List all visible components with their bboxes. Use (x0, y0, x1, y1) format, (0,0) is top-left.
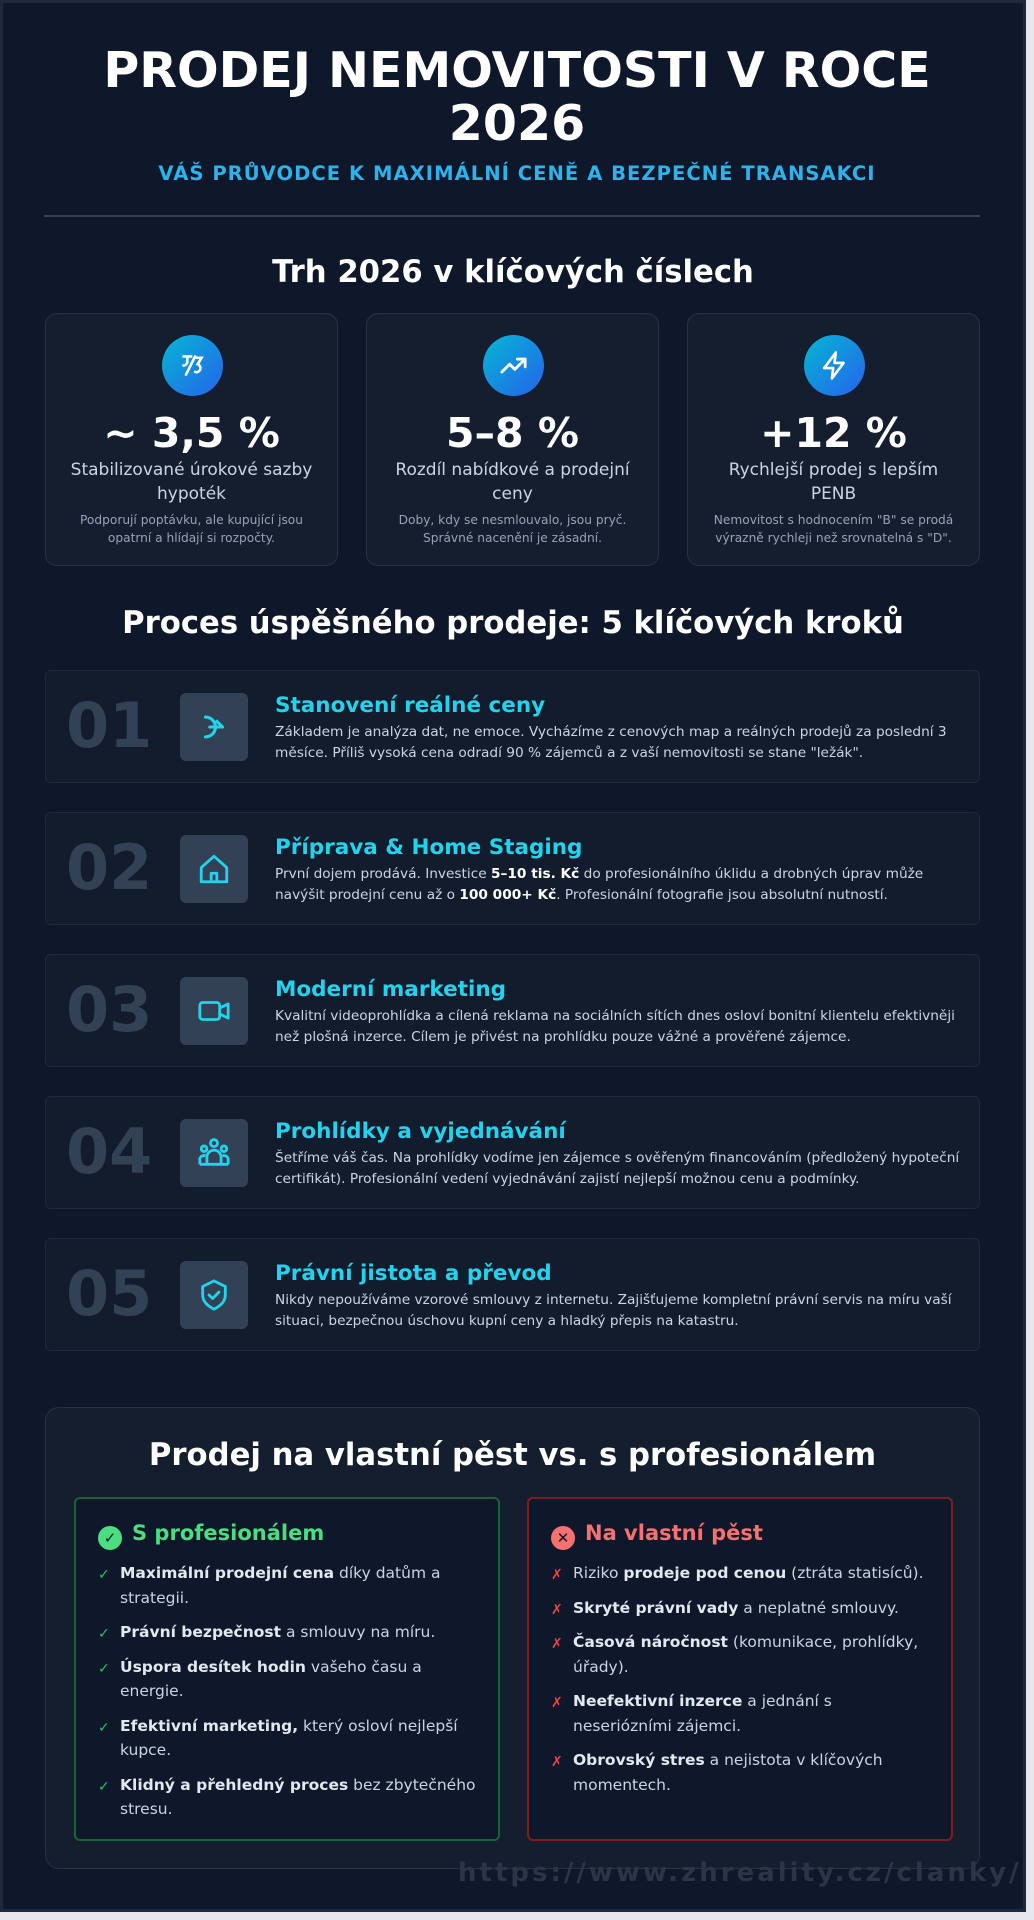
card: price gap: Rozdíl nabídkové a prodejní ceny (395, 460, 630, 504)
step 02 (45, 812, 980, 925)
box: own: ✕ (557, 1529, 569, 1547)
step 03 (45, 954, 980, 1067)
card: price gap: Doby, kdy se nesmlouvalo, jsou pryč. Správné nacenění je zásadní. (399, 513, 626, 545)
step 04 (45, 1096, 980, 1209)
panel: comparison (45, 1407, 980, 1869)
box: professional: ✓ (98, 1720, 110, 1736)
box: own: ✗ (551, 1636, 563, 1652)
card: PENB: +12 % (760, 409, 907, 457)
box: own: Na vlastní pěst (585, 1521, 763, 1545)
box: own: ✗ (551, 1602, 563, 1618)
box: professional: ✓ (104, 1529, 116, 1547)
step 05: Nikdy nepoužíváme vzorové smlouvy z internetu. Zajišťujeme kompletní právní servis na míru vaší situaci, bezpečnou úschovu kupní ceny a hladký přepis na katastru. (275, 1292, 952, 1329)
box: own: Riziko prodeje pod cenou (ztráta statisíců). (573, 1564, 924, 1582)
box: professional: Klidný a přehledný proces bez zbytečného stresu. (120, 1776, 476, 1818)
card: interest rates: ~ 3,5 % (103, 409, 280, 457)
step 02: Příprava & Home Staging (275, 835, 582, 860)
step 05 (45, 1238, 980, 1351)
box: professional: Maximální prodejní cena díky datům a strategii. (120, 1564, 440, 1606)
step 01 (45, 670, 980, 783)
subtitle: VÁŠ PRŮVODCE K MAXIMÁLNÍ CENĚ A BEZPEČNÉ TRANSAKCI (158, 162, 876, 185)
box: own: ✗ (551, 1754, 563, 1770)
step 01: Stanovení reálné ceny (275, 693, 545, 718)
icon: rates (162, 335, 223, 396)
box: professional: Efektivní marketing, který osloví nejlepší kupce. (120, 1716, 458, 1759)
box: own: Neefektivní inzerce a jednání s neseriózními zájemci. (573, 1692, 832, 1734)
box: own: Skryté právní vady a neplatné smlouvy. (573, 1598, 899, 1616)
step 03: Moderní marketing (275, 977, 506, 1002)
box: own: Časová náročnost (komunikace, prohlídky, úřady). (573, 1633, 918, 1676)
title: PRODEJ NEMOVITOSTI V ROCE 2026 (103, 42, 931, 152)
step 04: 04 (66, 1115, 152, 1188)
step 05: Právní jistota a převod (275, 1261, 552, 1286)
step 01: Základem je analýza dat, ne emoce. Vycházíme z cenových map a reálných prodejů za poslední 3 měsíce. Příliš vysoká cena odradí 90 % zájemců a z vaší nemovitosti se stane "ležák". (275, 724, 947, 761)
step 03: 03 (66, 973, 152, 1046)
card: PENB: Rychlejší prodej s lepším PENB (729, 460, 938, 504)
step 02: První dojem prodává. Investice 5–10 tis. Kč do profesionálního úklidu a drobných úprav může navýšit prodejní cenu až o 100 000+ Kč. Profesionální fotografie jsou absolutní nutností. (275, 866, 923, 903)
box: professional: ✓ (98, 1778, 110, 1794)
box: professional (74, 1497, 500, 1841)
heading: market numbers: Trh 2026 v klíčových číslech (272, 255, 754, 290)
step 04: Šetříme váš čas. Na prohlídky vodíme jen zájemce s ověřeným financováním (předložený hypoteční certifikát). Profesionální vedení vyjednávání zajistí nejlepší možnou cenu a podmínky. (275, 1150, 959, 1187)
comparison heading: Prodej na vlastní pěst vs. s profesionálem (149, 1438, 876, 1473)
box: professional: ✓ (98, 1660, 110, 1676)
box: professional: Úspora desítek hodin vašeho času a energie. (120, 1658, 422, 1700)
step 04: Prohlídky a vyjednávání (275, 1119, 566, 1144)
box: own: Obrovský stres a nejistota v klíčových momentech. (573, 1751, 883, 1794)
icon: people (180, 1119, 248, 1187)
card: interest rates: Stabilizované úrokové sazby hypoték (71, 460, 312, 504)
card: price gap (366, 313, 659, 566)
card: interest rates: Podporují poptávku, ale kupující jsou opatrní a hlídají si rozpočty. (80, 513, 303, 545)
box: professional: Právní bezpečnost a smlouvy na míru. (120, 1623, 435, 1641)
card: interest rates (45, 313, 338, 566)
icon: bolt (804, 335, 865, 396)
card: PENB: Nemovitost s hodnocením "B" se prodá výrazně rychleji než srovnatelná s "D". (714, 513, 953, 545)
box: professional: ✓ (98, 1567, 110, 1583)
heading: process: Proces úspěšného prodeje: 5 klíčových kroků (122, 606, 904, 641)
watermark: https://www.zhreality.cz/clanky/ (458, 1858, 1022, 1888)
icon: video (180, 977, 248, 1045)
box: own: ✗ (551, 1695, 563, 1711)
icon: house (180, 835, 248, 903)
card: price gap: 5–8 % (446, 409, 579, 457)
box: own: ✗ (551, 1567, 563, 1583)
box: professional: ✓ (98, 1626, 110, 1642)
step 02: 02 (66, 831, 152, 904)
step 03: Kvalitní videoprohlídka a cílená reklama na sociálních sítích dnes osloví bonitní klientelu efektivněji než plošná inzerce. Cílem je přivést na prohlídku pouze vážné a prověřené zájemce. (275, 1008, 955, 1045)
box: own (527, 1497, 953, 1841)
card: PENB (687, 313, 980, 566)
icon: trend (483, 335, 544, 396)
icon: shield (180, 1261, 248, 1329)
icon: price (180, 693, 248, 761)
box: professional: S profesionálem (132, 1521, 324, 1545)
step 05: 05 (66, 1257, 152, 1330)
step 01: 01 (66, 689, 152, 762)
